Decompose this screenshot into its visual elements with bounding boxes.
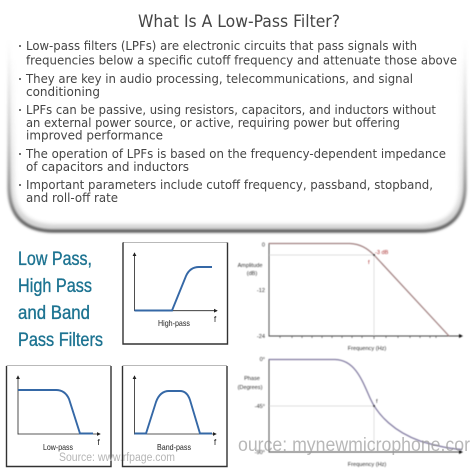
heading: filter types: High Pass — [18, 275, 92, 297]
heading: filter types: Low Pass, — [18, 248, 92, 270]
chart: band-pass: f — [214, 437, 217, 447]
bullet: parameters: Important parameters include cutoff frequency, passband, stopband, — [26, 178, 433, 192]
chart: phase response: Frequency (Hz) — [348, 462, 386, 468]
chart: band-pass: Band-pass — [157, 442, 191, 452]
bullet: operation: The operation of LPFs is based on the frequency-dependent impedance — [25, 147, 446, 161]
title: What Is A Low-Pass Filter? — [138, 12, 340, 31]
bullet: definition: Low-pass filters (LPFs) are electronic circuits that pass signals with — [26, 39, 417, 53]
chart: high-pass: High-pass — [158, 318, 190, 328]
chart: phase response: -45° — [255, 404, 265, 410]
chart: low-pass — [6, 366, 111, 466]
source caption: left: Source: www.rfpage.com — [59, 452, 175, 464]
bullet: operation: of capacitors and inductors — [26, 160, 189, 174]
bullet: definition — [19, 39, 457, 68]
bullet: applications: They are key in audio processing, telecommunications, and signal — [25, 72, 413, 86]
bullet: passive or active: LPFs can be passive, using resistors, capacitors, and inductors without — [26, 103, 436, 117]
chart: amplitude response: Frequency (Hz) — [348, 346, 386, 352]
bullet: operation — [19, 147, 446, 174]
chart: high-pass: f — [214, 314, 217, 324]
panel: key points — [9, 39, 465, 231]
bullet list — [19, 39, 457, 205]
chart: band-pass — [122, 366, 227, 466]
chart: phase response: -90° — [255, 450, 265, 456]
chart: amplitude response: 0 — [262, 242, 265, 248]
bullet: parameters — [19, 178, 433, 205]
bullet: passive or active: improved performance — [26, 128, 163, 142]
chart: high-pass — [123, 242, 228, 344]
chart: low-pass: f — [97, 437, 100, 447]
heading: filter types: Pass Filters — [18, 329, 103, 351]
bullet: passive or active: an external power source, or active, requiring power but offering — [26, 116, 400, 130]
chart: phase response — [238, 357, 463, 468]
heading: filter types — [18, 248, 103, 351]
heading: filter types: and Band — [18, 302, 90, 324]
chart: phase response: (Degrees) — [238, 385, 263, 391]
chart: low-pass: Low-pass — [43, 442, 73, 452]
chart: amplitude response: -12 — [257, 288, 265, 294]
bullet: passive or active — [19, 103, 436, 142]
bullet: applications: conditioning — [26, 85, 100, 99]
bullet: parameters: and roll-off rate — [26, 191, 118, 205]
chart: amplitude response: -3 dB — [375, 250, 389, 256]
chart: amplitude response: Amplitude — [238, 263, 262, 269]
chart: amplitude response: (dB) — [247, 271, 257, 277]
chart: phase response: Phase — [244, 376, 260, 382]
chart: amplitude response — [238, 242, 463, 352]
chart: amplitude response: f — [368, 260, 370, 266]
chart: amplitude response: -24 — [257, 334, 265, 340]
bullet: definition: frequencies below a specific cutoff frequency and attenuate those above — [26, 54, 457, 68]
chart: phase response: f — [376, 399, 378, 405]
chart: phase response: 0° — [260, 357, 265, 363]
bullet: applications — [19, 72, 413, 99]
